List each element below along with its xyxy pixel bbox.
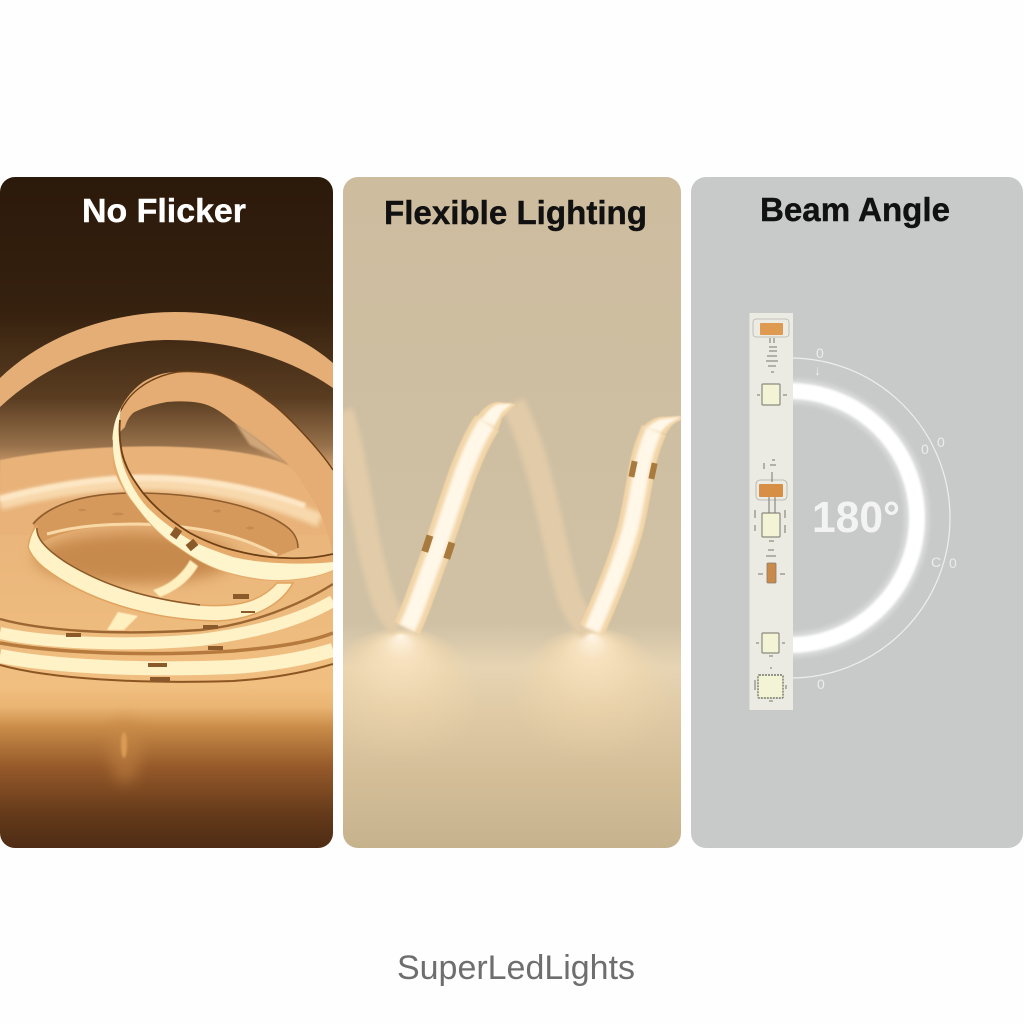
heading: Beam Angle: Beam Angle xyxy=(760,191,950,228)
upper loop lit band xyxy=(113,408,333,581)
lower ring back wall xyxy=(33,493,298,556)
outer angle arc xyxy=(790,358,950,678)
lower ring lit band xyxy=(28,526,293,621)
arc tick labels: 0 xyxy=(816,345,824,361)
back of wave xyxy=(341,412,400,626)
beam glow arc xyxy=(790,391,917,645)
LED 4 xyxy=(758,675,783,698)
panel: Flexible Lighting xyxy=(321,177,681,848)
LED strip xyxy=(750,313,793,710)
wall mottling xyxy=(78,509,254,530)
floor glow right xyxy=(548,630,636,716)
brand footer: SuperLedLights xyxy=(397,949,635,987)
large outer ring xyxy=(0,312,333,407)
strip 1 xyxy=(0,584,333,632)
arc tick labels: 0 xyxy=(817,676,825,692)
floor glow left xyxy=(356,629,446,716)
arc tick labels: 0 xyxy=(921,441,929,457)
panel: No Flicker xyxy=(0,177,333,848)
arc tick labels xyxy=(814,345,957,692)
arc tick labels: 0 xyxy=(937,434,945,450)
circuit traces xyxy=(755,338,787,701)
angle value: 180° xyxy=(812,493,900,542)
solder pads xyxy=(66,527,255,682)
panel: Beam Angle xyxy=(691,177,1023,848)
component: middle resistor xyxy=(756,480,787,500)
component: top resistor xyxy=(753,319,789,337)
floor reflection xyxy=(121,732,127,758)
arc tick labels: ↓ xyxy=(814,362,821,378)
horizontal glow band xyxy=(0,483,320,520)
strip 2 xyxy=(0,650,333,668)
lower ring centre glow xyxy=(153,560,198,597)
arc tick labels: 0 xyxy=(949,555,957,571)
LED 2 xyxy=(762,513,780,537)
lit wave 2 xyxy=(592,416,681,630)
plateau behind the strips xyxy=(0,446,306,488)
heading: No Flicker: No Flicker xyxy=(82,192,246,229)
heading: Flexible Lighting: Flexible Lighting xyxy=(384,194,647,231)
component: small resistor xyxy=(767,563,776,583)
beam arc xyxy=(790,391,917,645)
lower ring floor shading xyxy=(35,532,235,584)
LED 3 xyxy=(762,633,779,653)
solder pads xyxy=(421,461,658,560)
lit wave 1 xyxy=(407,402,516,628)
upper loop tan band xyxy=(112,372,333,557)
arc tick labels: C xyxy=(931,554,941,570)
LED 1 xyxy=(762,384,780,405)
